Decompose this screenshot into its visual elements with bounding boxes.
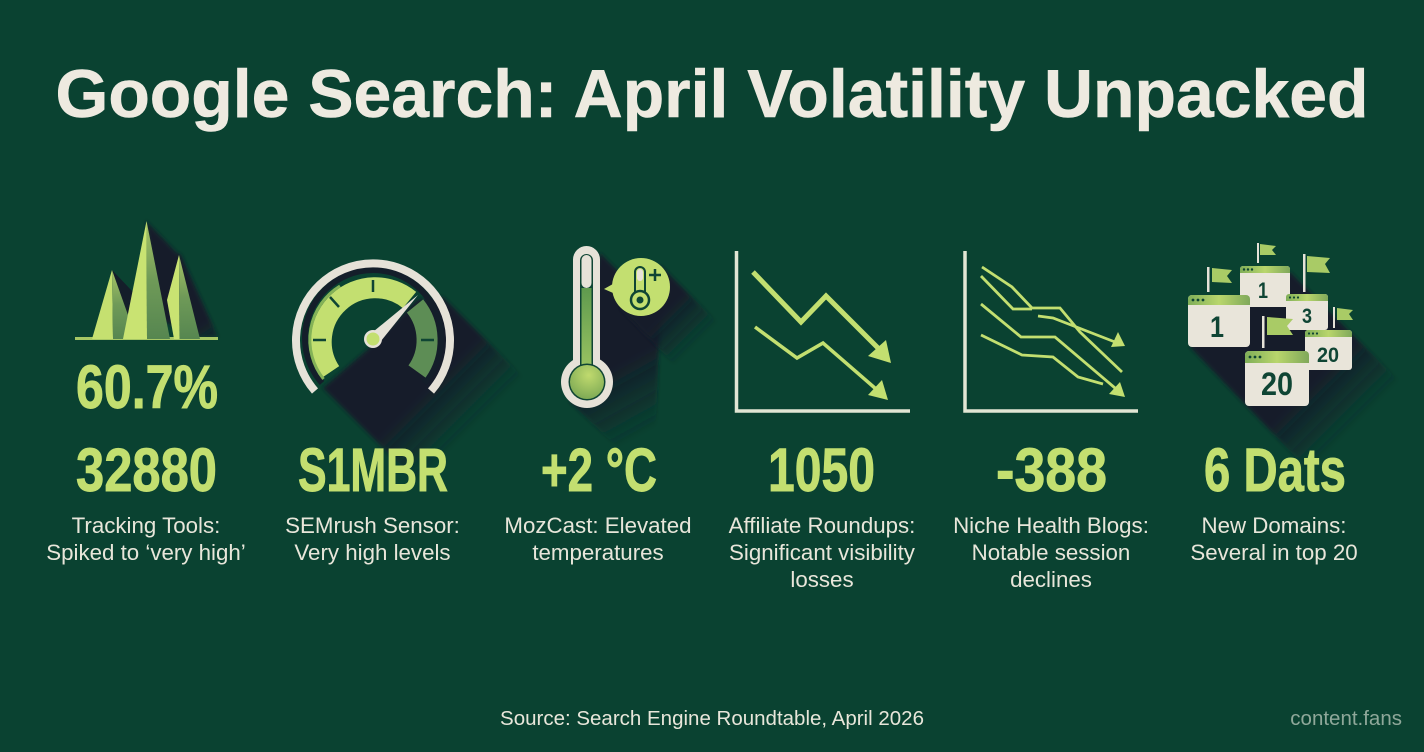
description: affiliate roundups: Significant visibility bbox=[729, 540, 916, 565]
description: niche health blogs: Niche Health Blogs: bbox=[953, 513, 1149, 538]
stat: 1050: 1050 bbox=[768, 436, 875, 504]
stat: S1MBR: S1MBR bbox=[298, 436, 448, 504]
description: new domains: Several in top 20 bbox=[1190, 540, 1358, 565]
description: semrush sensor: SEMrush Sensor: bbox=[285, 513, 460, 538]
panel: affiliate roundups bbox=[729, 251, 916, 592]
description: mozcast: MozCast: Elevated bbox=[504, 513, 692, 538]
icon: ranking calendars and flags: 1 bbox=[1210, 311, 1224, 344]
panel: new domains bbox=[1188, 243, 1400, 565]
description: mozcast: temperatures bbox=[532, 540, 664, 565]
description: niche health blogs: Notable session bbox=[972, 540, 1130, 565]
stat: 32880: 32880 bbox=[76, 436, 217, 504]
stat: 60.7%: 60.7% bbox=[76, 353, 218, 421]
icon: volatility peaks bbox=[75, 221, 218, 340]
description: new domains: New Domains: bbox=[1202, 513, 1346, 538]
icon: ranking calendars and flags: 20 bbox=[1317, 344, 1339, 367]
icon: ranking calendars and flags: 20 bbox=[1261, 366, 1293, 402]
icon: thermometer with callout bbox=[561, 246, 735, 450]
stat: 6 Dats: 6 Dats bbox=[1204, 436, 1346, 504]
panel: tracking tools bbox=[46, 221, 246, 565]
icon: multi-line falling chart bbox=[965, 251, 1138, 411]
description: affiliate roundups: Affiliate Roundups: bbox=[729, 513, 915, 538]
panel: semrush sensor bbox=[285, 263, 540, 565]
stat: -388: -388 bbox=[996, 436, 1107, 504]
panel: niche health blogs bbox=[953, 251, 1149, 592]
stat: +2 °C: +2 °C bbox=[541, 436, 657, 504]
icon: ranking calendars and flags bbox=[1188, 243, 1400, 472]
icon: ranking calendars and flags: 1 bbox=[1258, 278, 1268, 303]
title: Google Search: April Volatility Unpacked bbox=[56, 56, 1368, 132]
panel: mozcast bbox=[504, 246, 735, 565]
source line: Source: Search Engine Roundtable, April 2026 bbox=[500, 707, 924, 730]
icon: speedometer gauge bbox=[296, 263, 540, 485]
watermark: content.fans bbox=[1290, 707, 1402, 730]
icon: falling line chart bbox=[736, 251, 910, 411]
description: niche health blogs: declines bbox=[1010, 567, 1092, 592]
description: semrush sensor: Very high levels bbox=[294, 540, 451, 565]
icon: ranking calendars and flags: 3 bbox=[1302, 305, 1312, 328]
description: affiliate roundups: losses bbox=[790, 567, 854, 592]
description: tracking tools: Spiked to ‘very high’ bbox=[46, 540, 246, 565]
description: tracking tools: Tracking Tools: bbox=[72, 513, 220, 538]
